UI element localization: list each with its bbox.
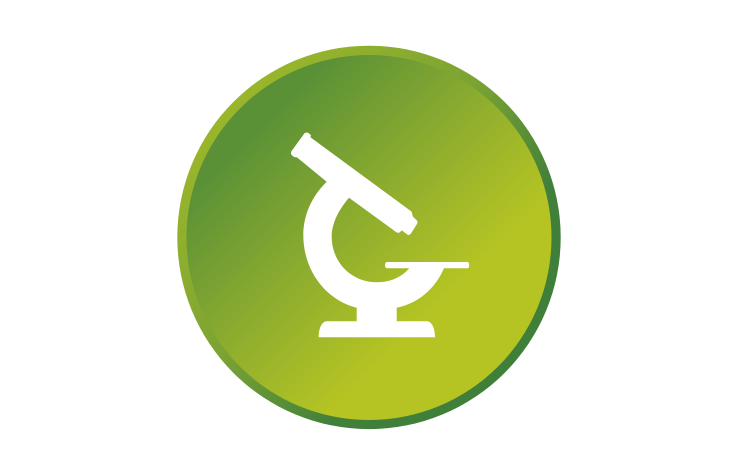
microscope body and tube xyxy=(291,132,469,337)
icon: microscope xyxy=(291,132,469,337)
inner disc xyxy=(186,55,552,420)
badge circle xyxy=(177,46,561,429)
outer ring xyxy=(177,46,561,429)
